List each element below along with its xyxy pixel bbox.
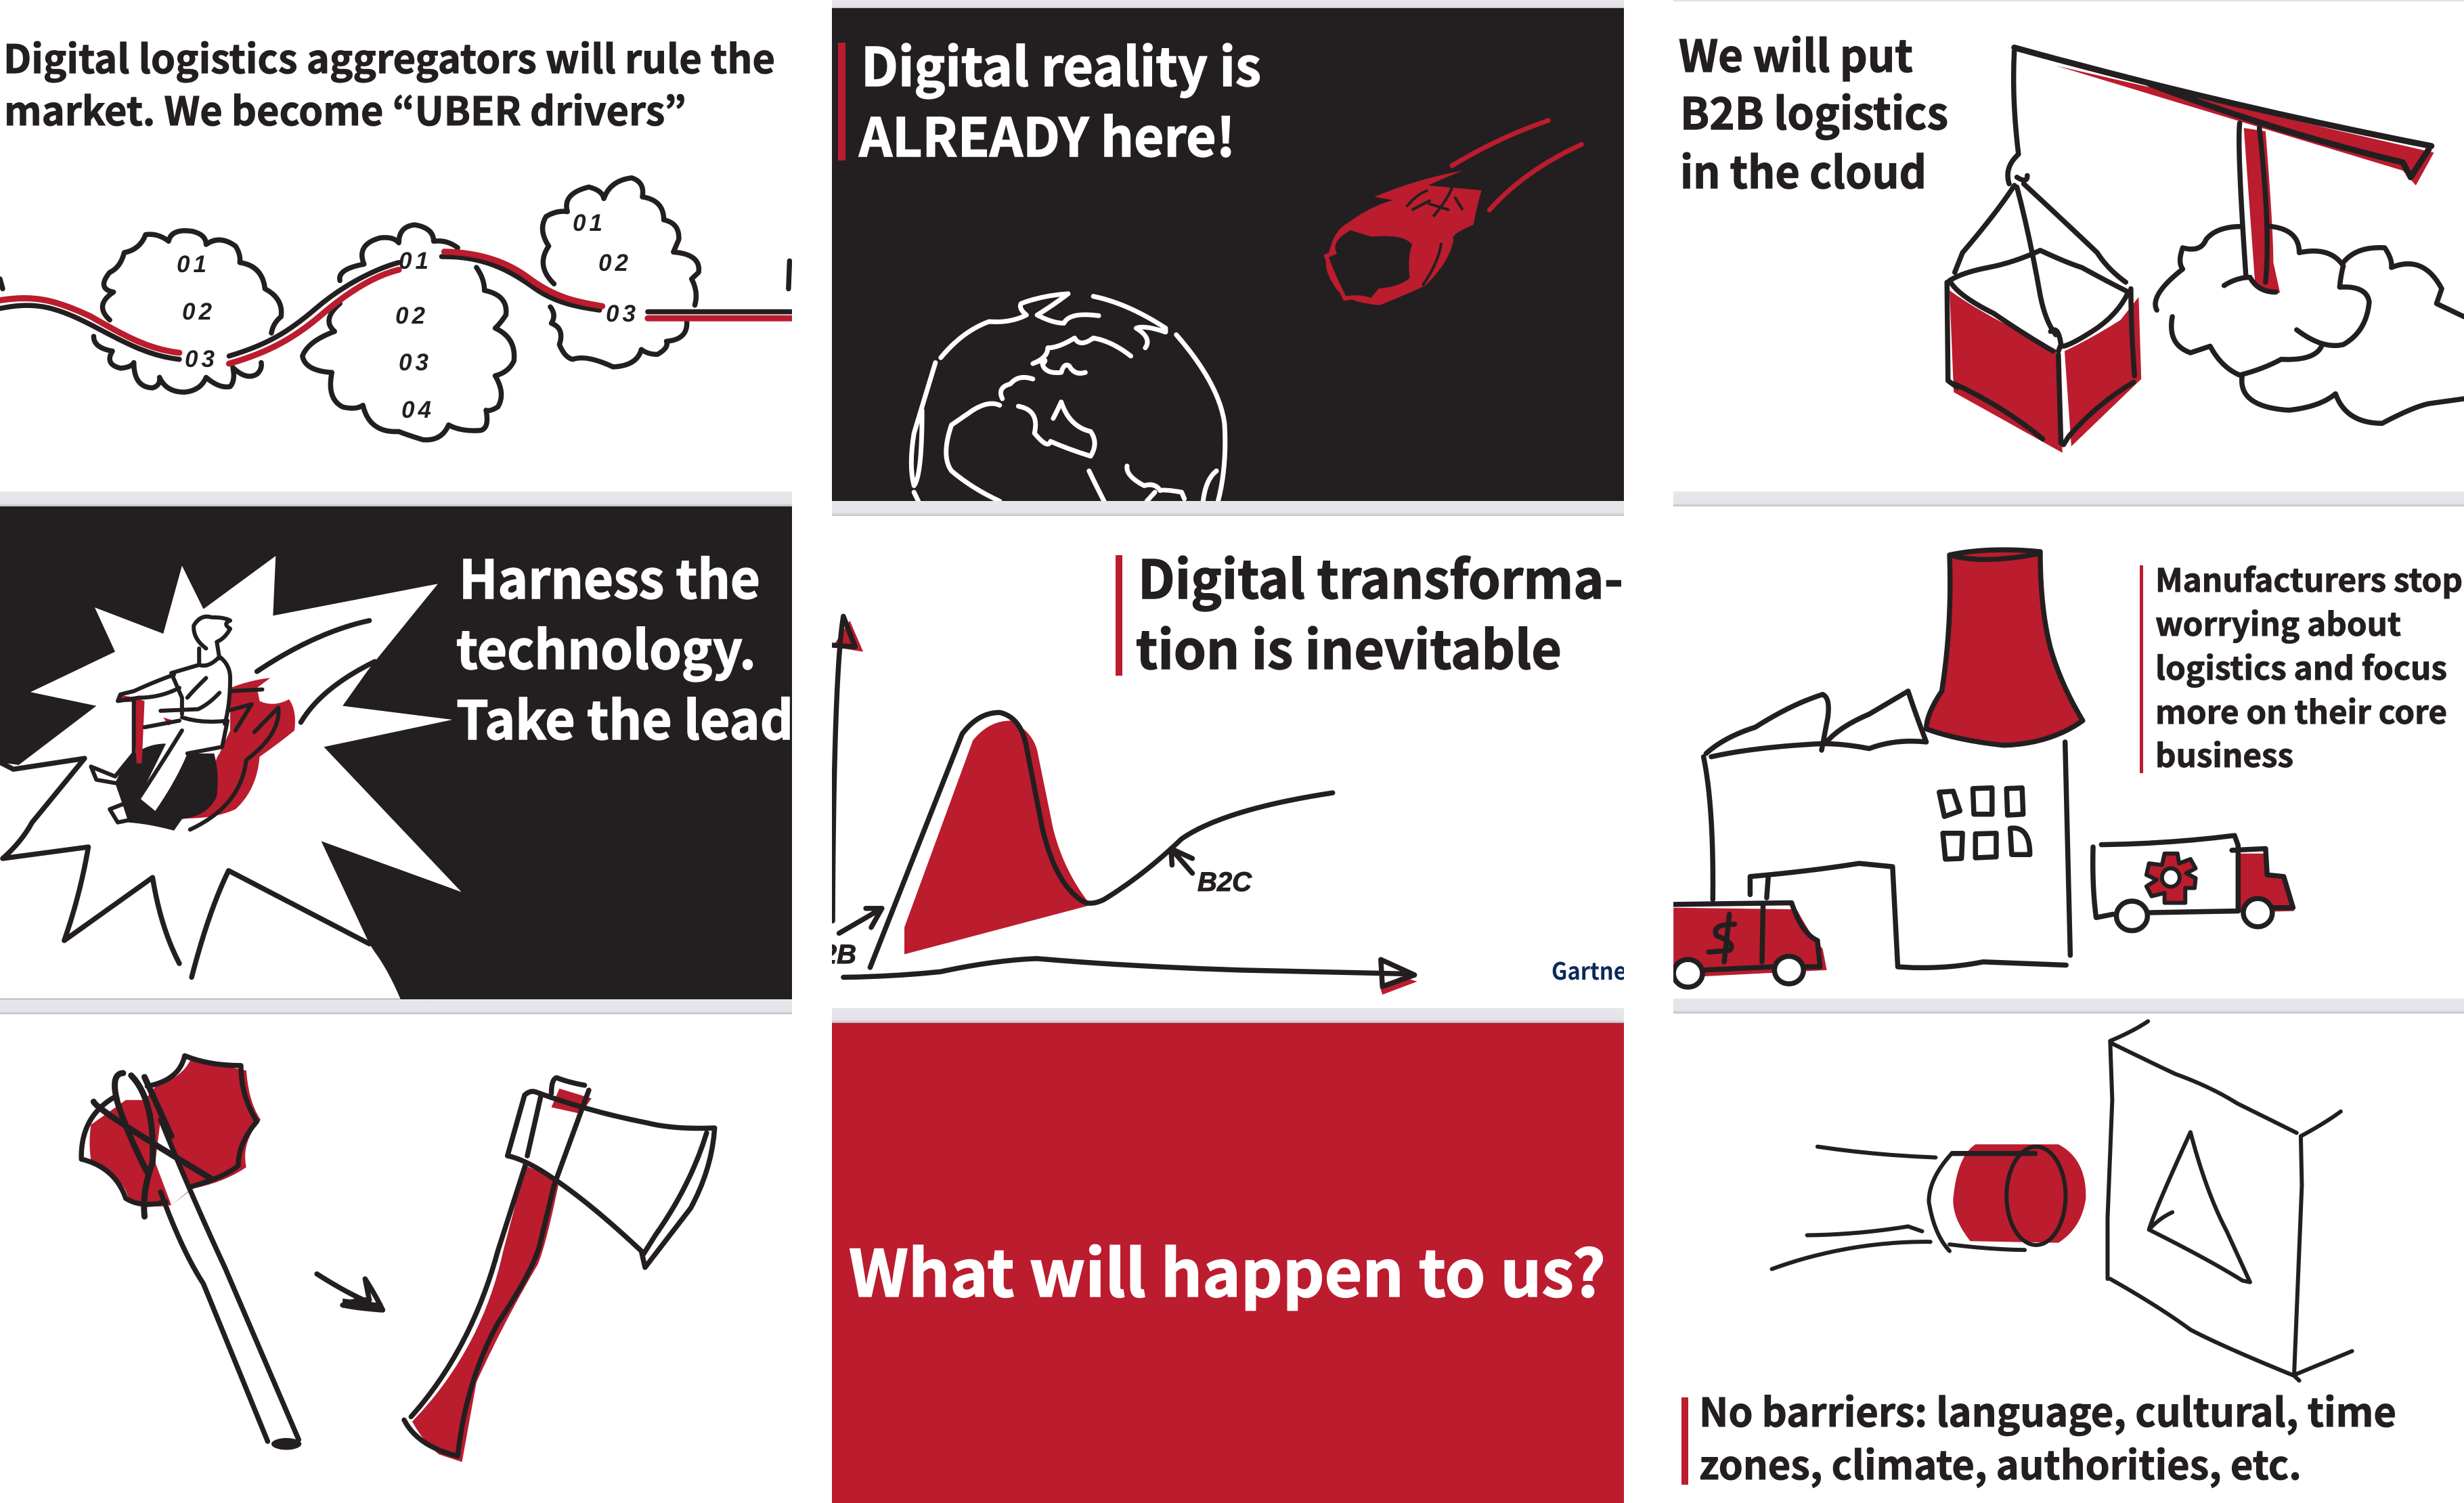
accent bar: [1116, 555, 1122, 676]
cloud labels: 02: [182, 299, 215, 325]
panel: what will happen to us: [832, 1023, 1624, 1503]
chart label: B2C: B2C: [1197, 867, 1252, 897]
panel: harness the technology: [0, 506, 793, 999]
text: manufacturers: logistics and focus: [2155, 642, 2447, 689]
heading: transformation: tion is inevitable: [1136, 609, 1562, 684]
chart: hype cycle curve: [833, 616, 1417, 995]
heading: transformation: Digital transforma-: [1138, 538, 1623, 614]
cloud labels: 03: [185, 346, 218, 372]
text: manufacturers: worrying about: [2155, 598, 2401, 645]
text: no barriers: No barriers: language, cultural, time: [1699, 1381, 2396, 1438]
icon: globe: [911, 294, 1225, 501]
panel: B2B logistics in the cloud: [1679, 21, 2464, 453]
heading: digital reality: [858, 43, 1260, 158]
panel: digital logistics aggregators: [0, 28, 791, 440]
cloud labels: 01: [177, 251, 210, 278]
text: manufacturers: [2155, 554, 2463, 777]
panel: digital reality: [832, 8, 1624, 501]
heading: digital reality: Digital reality is: [861, 26, 1261, 102]
accent bar: [2140, 565, 2143, 773]
illustration: stone axe, arrow and modern axe: [81, 1055, 715, 1462]
panel: axes: [81, 1055, 715, 1462]
heading: aggregators: Digital logistics aggregators will rule the: [3, 28, 775, 85]
text: manufacturers: Manufacturers stop: [2155, 554, 2463, 601]
heading: transformation: [1136, 538, 1623, 684]
heading: cloud: We will put: [1679, 21, 1913, 85]
cloud labels: 01: [573, 210, 606, 236]
illustration: factory and trucks: [1673, 550, 2294, 987]
text: no barriers: [1699, 1381, 2396, 1491]
source: Gartner: Gartner: [1552, 953, 1637, 987]
text: manufacturers: more on their core: [2155, 687, 2447, 733]
heading: harness: Harness the: [459, 538, 760, 614]
cloud labels: 03: [606, 301, 639, 327]
heading: aggregators: market. We become “UBER drivers”: [4, 80, 686, 137]
text: manufacturers: business: [2155, 730, 2293, 777]
cloud labels: 02: [598, 250, 632, 276]
panel: manufacturers: [1673, 550, 2463, 987]
heading: cloud: [1679, 35, 1947, 190]
illustration: starburst with rider: [0, 556, 462, 999]
text: no barriers: zones, climate, authorities, etc.: [1699, 1434, 2302, 1491]
heading: cloud: in the cloud: [1680, 137, 1927, 201]
panel: no barriers: [1681, 1021, 2396, 1491]
separator bars: [0, 0, 2464, 1023]
heading: aggregators: [7, 41, 774, 126]
accent bar: [1681, 1397, 1688, 1485]
heading: question: What will happen to us?: [849, 1223, 1606, 1315]
heading: harness: [456, 555, 790, 741]
cloud labels: 03: [399, 349, 432, 376]
panel: digital transformation: [802, 538, 1637, 995]
illustration: crane lifting box out of cloud: [1947, 47, 2464, 453]
heading: cloud: B2B logistics: [1680, 79, 1948, 142]
chart label: B2B: B2B: [802, 940, 856, 970]
cloud labels: 02: [395, 303, 428, 329]
illustration: clouds and route: [0, 178, 791, 440]
heading: digital reality: ALREADY here!: [858, 96, 1235, 172]
cloud labels: 01: [399, 248, 432, 274]
icon: meteor: [1326, 121, 1581, 305]
heading: harness: technology.: [456, 609, 756, 684]
heading: harness: Take the lead: [456, 679, 793, 755]
cloud labels: 04: [401, 397, 435, 423]
accent bar: [838, 43, 845, 160]
illustration: cylinder passing through wall: [1772, 1021, 2352, 1380]
cloud labels: [177, 210, 639, 423]
